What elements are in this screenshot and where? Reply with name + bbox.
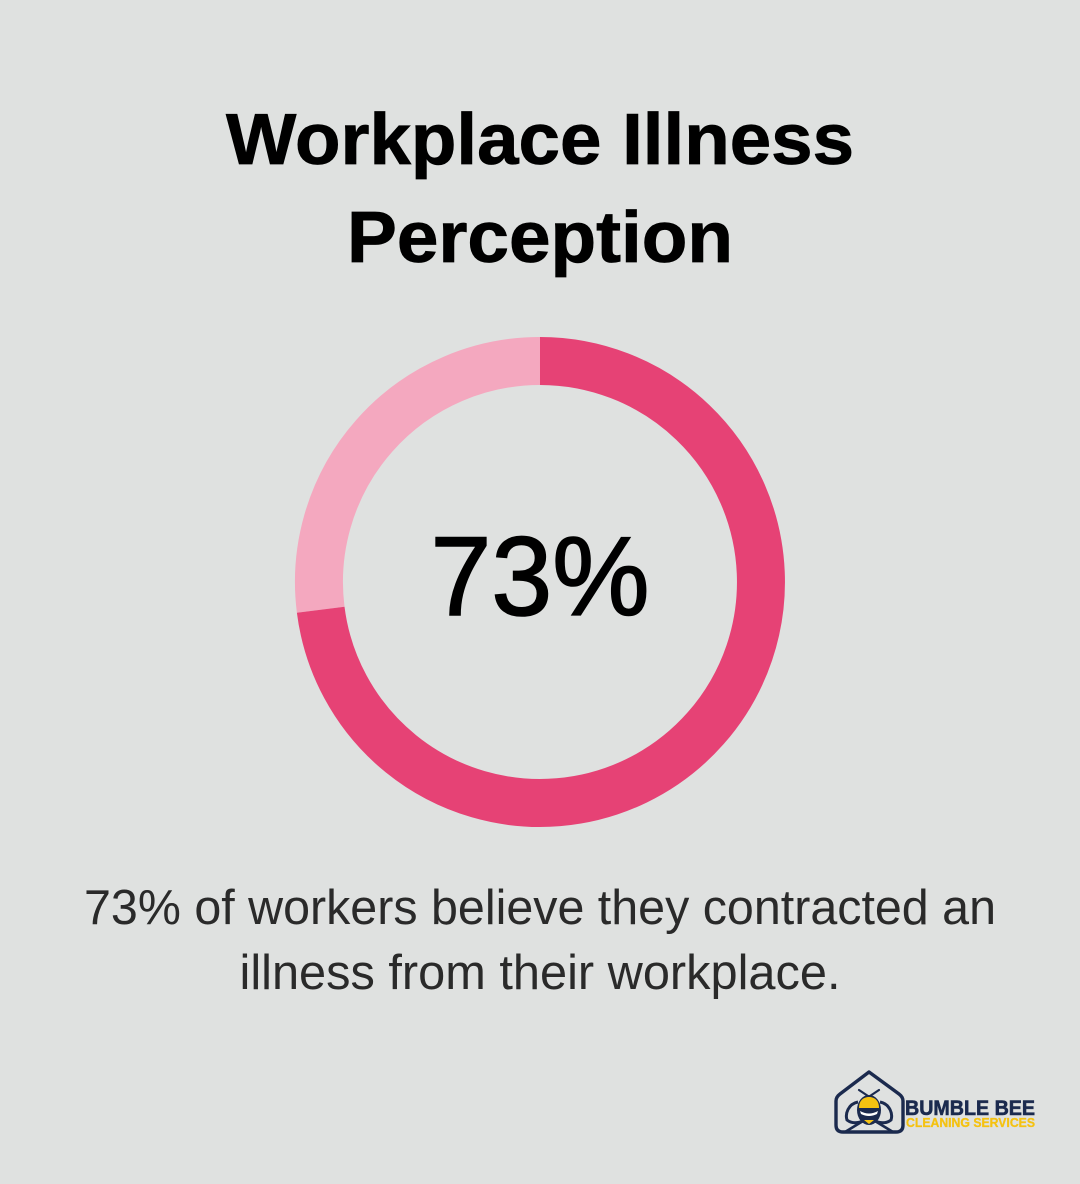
title: Workplace Illness [226, 100, 854, 180]
remaining 27% segment [319, 361, 540, 610]
title: Perception [347, 198, 733, 278]
description text: illness from their workplace. [240, 946, 840, 1000]
icon: house with bee [836, 1072, 903, 1132]
center value: 73% [430, 514, 650, 639]
logo: Bumble Bee Cleaning Services [836, 1072, 1035, 1132]
logo wordmark: BUMBLE BEE [905, 1097, 1035, 1120]
73% segment [321, 361, 761, 803]
description text: 73% of workers believe they contracted an [84, 881, 996, 935]
donut chart: 73% [319, 361, 761, 803]
description text [84, 881, 996, 1000]
logo tagline: CLEANING SERVICES [906, 1116, 1035, 1130]
title [226, 100, 854, 278]
